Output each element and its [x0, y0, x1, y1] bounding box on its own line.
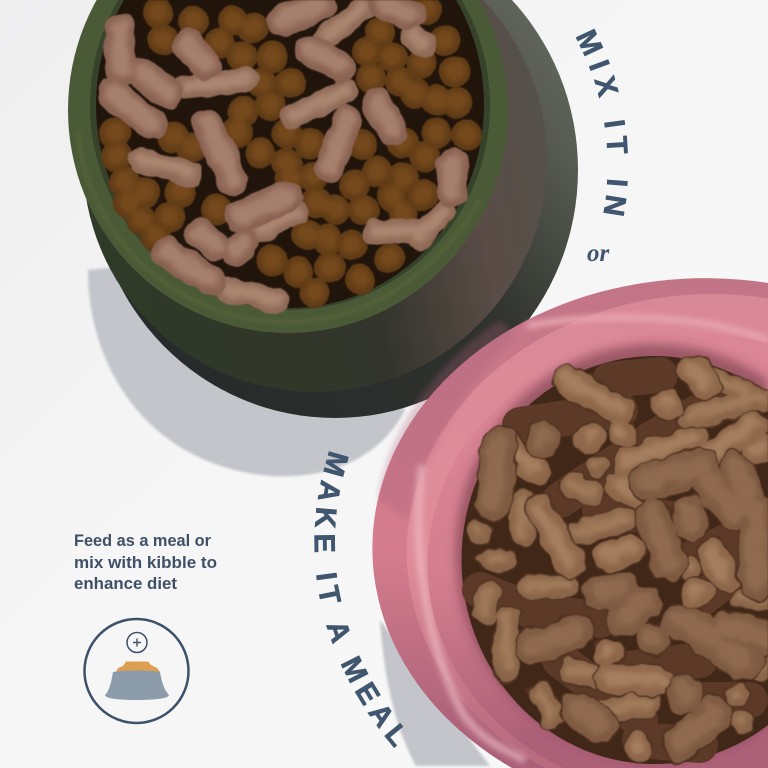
pink bowl food	[462, 356, 768, 764]
freeze-dried pieces in green bowl	[112, 4, 452, 300]
text block: feeding description: enhance diet	[74, 575, 178, 593]
pink bowl flange	[372, 278, 768, 768]
icon: bowl	[105, 670, 169, 700]
text block: feeding description: mix with kibble to	[74, 554, 217, 572]
rim highlight	[78, 130, 480, 322]
green bowl food	[96, 0, 484, 308]
green bowl body	[83, 0, 547, 392]
icon: kibble pile	[116, 662, 160, 672]
rim highlight left	[419, 465, 525, 760]
curved heading: mix it in: MIX IT IN	[576, 28, 628, 216]
green bowl inner wall	[90, 0, 490, 310]
text block: feeding description: Feed as a meal or	[74, 532, 212, 550]
word: or: or	[587, 240, 610, 267]
flange shadow upper-left	[378, 320, 515, 520]
green bowl	[68, 0, 578, 418]
shadow around food	[456, 344, 768, 760]
food bed	[462, 356, 768, 764]
icon: plus in circle	[127, 632, 147, 652]
text block: feeding description	[74, 532, 217, 593]
kibble pieces	[115, 9, 467, 293]
bowl shadows	[88, 250, 490, 766]
rim highlight top	[527, 317, 768, 340]
green bowl rim	[68, 0, 508, 333]
icon: bowl with plus	[84, 619, 188, 723]
pink bowl	[372, 278, 768, 768]
food bed	[96, 0, 484, 308]
underlying darker pieces	[480, 375, 750, 745]
pink bowl lip	[407, 294, 768, 768]
freeze-dried pieces in pink bowl	[479, 368, 767, 747]
green bowl plate	[92, 0, 578, 418]
curved heading: make it a meal: MAKE IT A MEAL	[314, 451, 404, 748]
pink bowl inner wall	[428, 333, 768, 768]
